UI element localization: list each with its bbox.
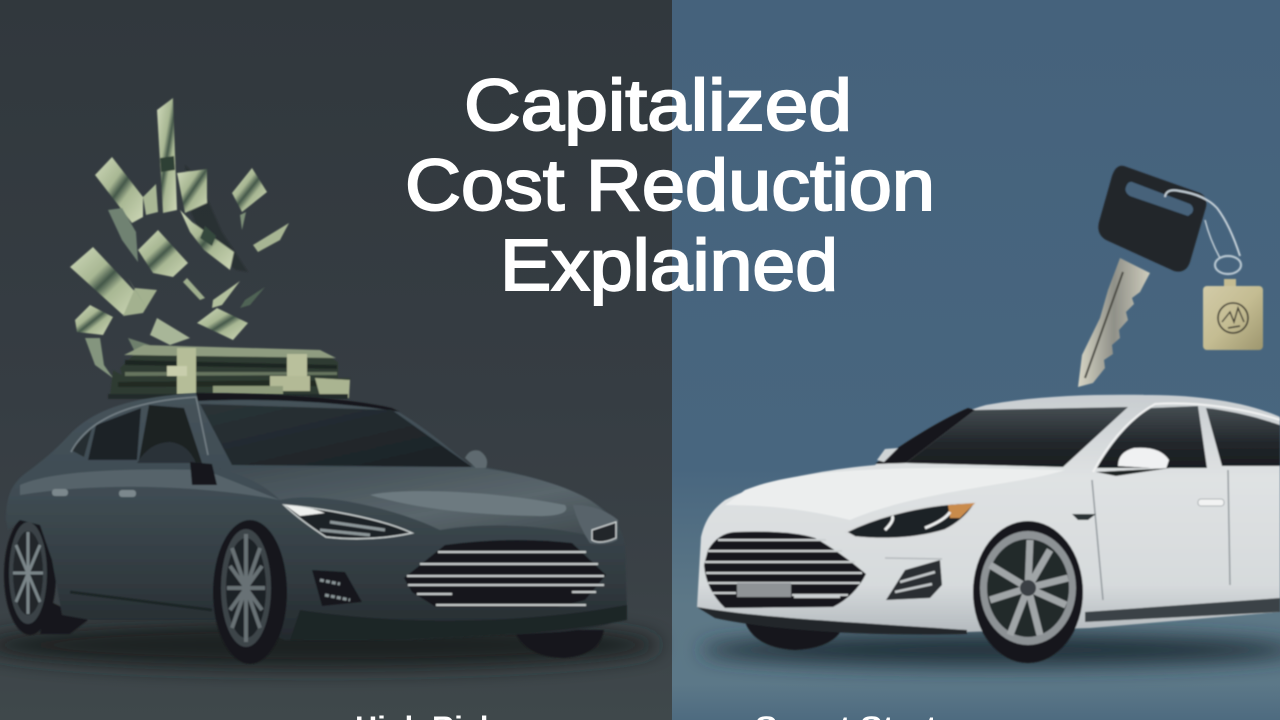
right car ground shadow xyxy=(700,634,1280,666)
left car lower bumper xyxy=(290,605,627,640)
title xyxy=(405,66,935,306)
title: Explained xyxy=(500,226,838,306)
right car body xyxy=(697,395,1280,632)
left car rocker xyxy=(70,592,212,610)
left car front wheel xyxy=(213,520,287,664)
left car body xyxy=(6,393,627,640)
left car far headlight xyxy=(573,505,618,544)
right car side vent xyxy=(1072,514,1096,520)
key blade xyxy=(1078,258,1150,387)
left car roof edge xyxy=(196,393,400,412)
right car windshield xyxy=(906,407,1128,467)
right car hood highlight xyxy=(725,468,1065,520)
right car lower bumper xyxy=(697,607,967,634)
illustration: car key with tag xyxy=(1078,166,1263,387)
left car headlight xyxy=(284,505,412,539)
right car front wheel xyxy=(973,521,1083,663)
left car rear wheel xyxy=(40,600,88,634)
title: Cost Reduction xyxy=(405,146,935,226)
illustration: white car (right) xyxy=(697,395,1280,666)
right car door lines and handle xyxy=(1092,470,1230,600)
right car licence plate xyxy=(737,583,791,597)
right car far mirror xyxy=(877,448,898,462)
left car shoulder highlight xyxy=(20,470,280,500)
illustration: flying money and cash stack xyxy=(70,98,350,399)
left car side mirror xyxy=(137,442,196,463)
right car fog lamp xyxy=(886,560,942,600)
panel: right blue background xyxy=(672,0,1280,720)
right car side windows xyxy=(1097,406,1207,468)
left car side windows xyxy=(88,408,141,460)
left car hood xyxy=(210,467,611,538)
left car fog lamp xyxy=(312,570,362,606)
right car headlight xyxy=(846,503,975,538)
left car door handles xyxy=(52,489,68,496)
money stack base xyxy=(110,345,350,398)
right car front far tire xyxy=(745,622,845,650)
panel: left dark background xyxy=(0,0,672,720)
left car windshield xyxy=(200,404,472,467)
right car grille xyxy=(704,532,866,608)
right car side mirror xyxy=(1118,448,1169,469)
left car grille xyxy=(404,540,606,607)
key fob xyxy=(1098,166,1206,272)
title: Capitalized xyxy=(464,66,852,146)
right car rocker xyxy=(1085,598,1280,622)
left car front far tire xyxy=(514,630,604,658)
left car ground shadow xyxy=(0,621,660,669)
left car rear rim xyxy=(9,522,47,624)
key ring wire xyxy=(1165,190,1240,256)
key tag xyxy=(1203,286,1263,350)
illustration: dark car (left) xyxy=(0,393,660,669)
